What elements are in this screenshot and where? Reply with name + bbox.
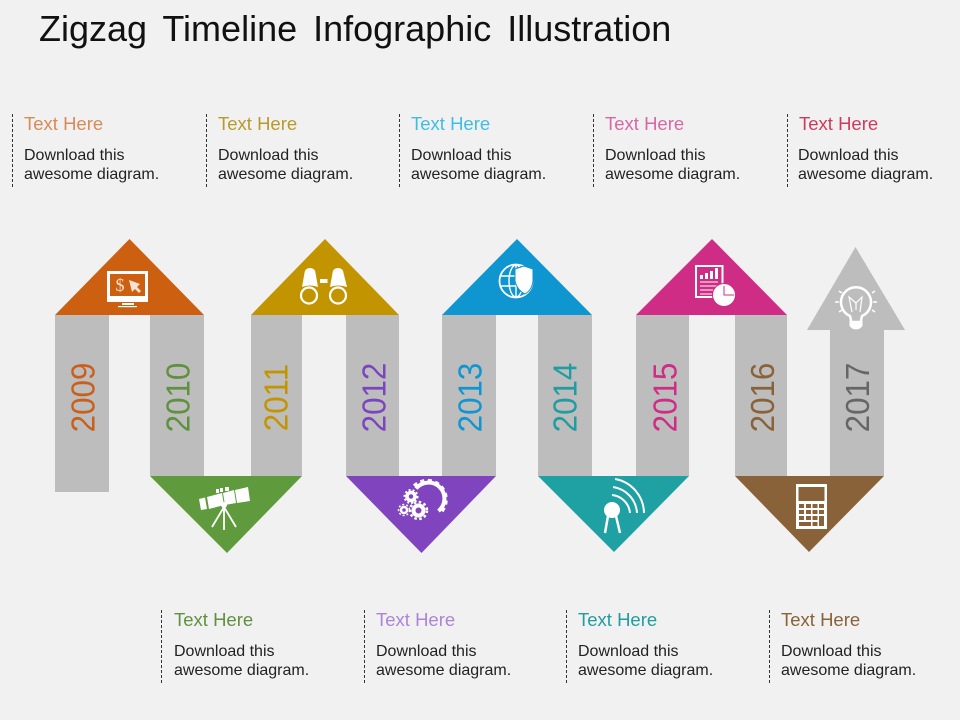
callout: 2011 (206, 113, 353, 188)
callout: 2017: Text Here (799, 113, 878, 134)
callout: 2011: Text Here (218, 113, 297, 134)
callout: 2010: awesome diagram. (174, 662, 309, 679)
callout: 2013: Download this (411, 147, 512, 164)
callout: 2014: awesome diagram. (578, 662, 713, 679)
green triangle (150, 476, 302, 553)
callout: 2016: Download this (781, 643, 882, 660)
callout: 2011: Download this (218, 147, 318, 164)
bar 2015: 2015 (647, 363, 684, 432)
bar 2014: 2014 (547, 363, 584, 432)
icon: report with pie (696, 266, 736, 306)
blue triangle (442, 239, 592, 315)
callout: 2014 (566, 609, 713, 684)
callout: 2015: Download this (605, 147, 706, 164)
callout: 2012: Download this (376, 643, 476, 660)
bar 2016: 2016 (744, 363, 781, 432)
callout: 2011: awesome diagram. (218, 166, 353, 183)
callout: 2016: awesome diagram. (781, 662, 916, 679)
callout: 2010 (162, 609, 309, 684)
bar 2009: 2009 (65, 363, 102, 432)
callout: 2010: Download this (174, 643, 274, 660)
bar 2013: 2013 (452, 363, 489, 432)
callout: 2015: Text Here (605, 113, 684, 134)
gold triangle (251, 239, 399, 315)
timeline zigzag (55, 239, 905, 553)
callout: 2012 (364, 609, 511, 684)
callout: 2009: Download this (24, 147, 124, 164)
callout: 2017: awesome diagram. (798, 166, 933, 183)
icon: binoculars (301, 268, 347, 304)
icon: light bulb (835, 287, 877, 330)
callout: 2017 (788, 113, 933, 188)
callout: 2014: Download this (578, 643, 678, 660)
callout: 2012: Text Here (376, 609, 455, 630)
callout: 2014: Text Here (578, 609, 657, 630)
icon: antenna with signal (604, 479, 644, 533)
bar 2011 (251, 315, 302, 476)
pink triangle (636, 239, 787, 315)
bar 2015 (636, 315, 689, 476)
callout: 2013: Text Here (411, 113, 490, 134)
bar 2010 (150, 315, 204, 476)
callout: 2016 (770, 609, 916, 684)
bar 2010: 2010 (160, 363, 197, 432)
callout: 2017: Download this (798, 147, 898, 164)
callout: 2016: Text Here (781, 609, 860, 630)
bar 2013 (442, 315, 496, 476)
bar 2009 (55, 315, 109, 492)
callout: 2009: awesome diagram. (24, 166, 159, 183)
icon: calculator (796, 484, 827, 529)
callout: 2009: Text Here (24, 113, 103, 134)
callout: 2015: awesome diagram. (605, 166, 740, 183)
bar 2014 (538, 315, 592, 476)
arrow 2017: 2017 (839, 363, 876, 432)
bar 2012 (346, 315, 399, 476)
purple triangle (346, 476, 496, 553)
callout: 2010: Text Here (174, 609, 253, 630)
callout: 2012: awesome diagram. (376, 662, 511, 679)
bar 2012: 2012 (356, 363, 393, 432)
callout: 2013 (400, 113, 546, 188)
icon: monitor with dollar (107, 271, 148, 307)
icon: gears (398, 481, 446, 519)
title: Zigzag Timeline Infographic Illustration (39, 8, 671, 49)
teal triangle (538, 476, 689, 552)
icon: monitor with dollar: $ (116, 275, 124, 295)
bar 2016 (735, 315, 787, 476)
icon: telescope (199, 487, 250, 530)
callout: 2009 (12, 113, 159, 188)
brown triangle (735, 476, 884, 552)
callout: 2013: awesome diagram. (411, 166, 546, 183)
bar 2011: 2011 (258, 364, 295, 431)
icon: globe with shield (500, 264, 533, 298)
callout: 2015 (594, 113, 740, 188)
arrow 2017 (807, 247, 905, 476)
orange triangle (55, 239, 204, 315)
